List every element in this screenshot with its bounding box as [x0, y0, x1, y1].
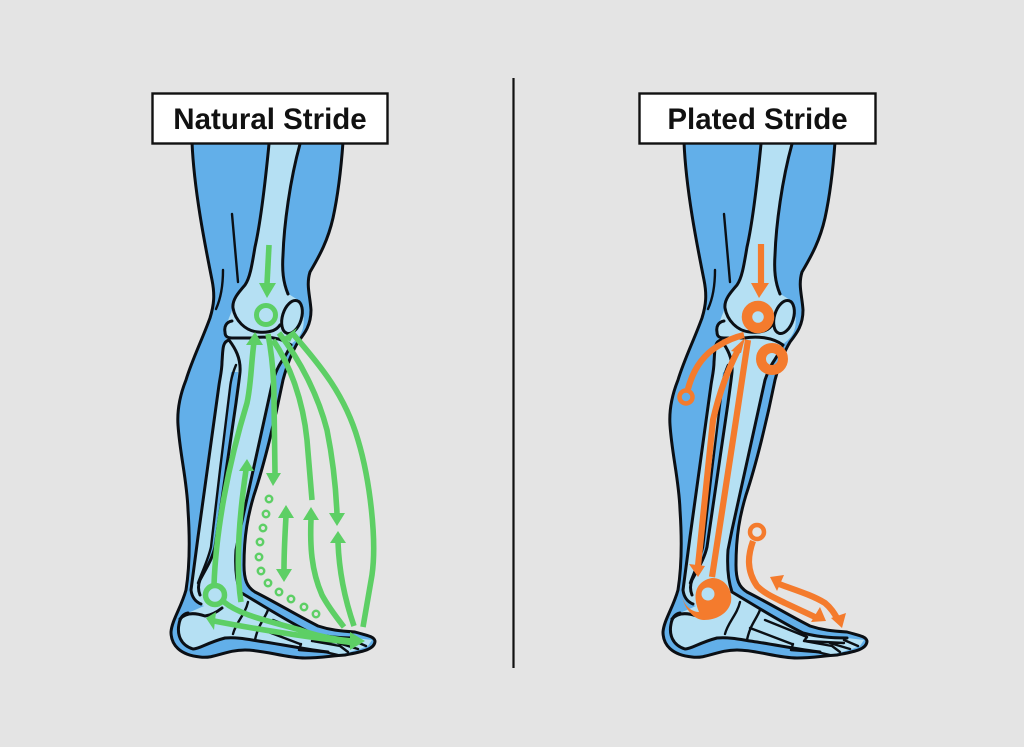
knee joint ring	[747, 306, 769, 328]
small ring near foot	[750, 525, 764, 539]
long arrow: knee to ankle	[689, 338, 745, 577]
lower knee ring	[761, 348, 783, 370]
double arrow: over foot	[770, 575, 846, 628]
line: knee to calf	[273, 340, 312, 500]
arrow: knee to lower calf	[279, 333, 345, 526]
heading: natural stride	[152, 94, 388, 144]
small ring on calf	[680, 390, 692, 404]
double arrow: calf	[276, 505, 294, 582]
knee joint ring	[256, 306, 276, 324]
long line: ankle to knee	[712, 340, 748, 577]
arrow: outer curve knee to toes	[284, 328, 374, 627]
heading: natural stride: Natural Stride	[173, 103, 367, 136]
arrow: up along shin	[238, 459, 254, 602]
arrow: ankle up to knee	[214, 332, 263, 585]
arrow: foot to calf 1	[303, 507, 344, 627]
panel: natural stride	[152, 94, 388, 658]
leg illustration: natural	[171, 142, 375, 658]
force arrow: thigh to knee	[751, 244, 769, 298]
dotted calf path	[256, 496, 319, 617]
arrow: heel to toes	[206, 612, 355, 643]
panel: plated stride	[640, 94, 876, 658]
force arrow: thigh to knee	[259, 245, 276, 298]
curve: calf to knee	[688, 335, 744, 389]
heading: plated stride: Plated Stride	[667, 103, 848, 136]
arrow: foot to calf 2	[330, 531, 354, 626]
arrow: ankle to toes	[224, 602, 365, 650]
ankle joint ring	[206, 586, 224, 604]
arrow: calf to foot	[749, 541, 826, 622]
center divider	[512, 78, 515, 668]
leg illustration: plated	[663, 142, 867, 658]
ankle joint swirl	[682, 578, 731, 620]
arrow: knee down to shin	[266, 334, 281, 486]
heading: plated stride	[640, 94, 876, 144]
